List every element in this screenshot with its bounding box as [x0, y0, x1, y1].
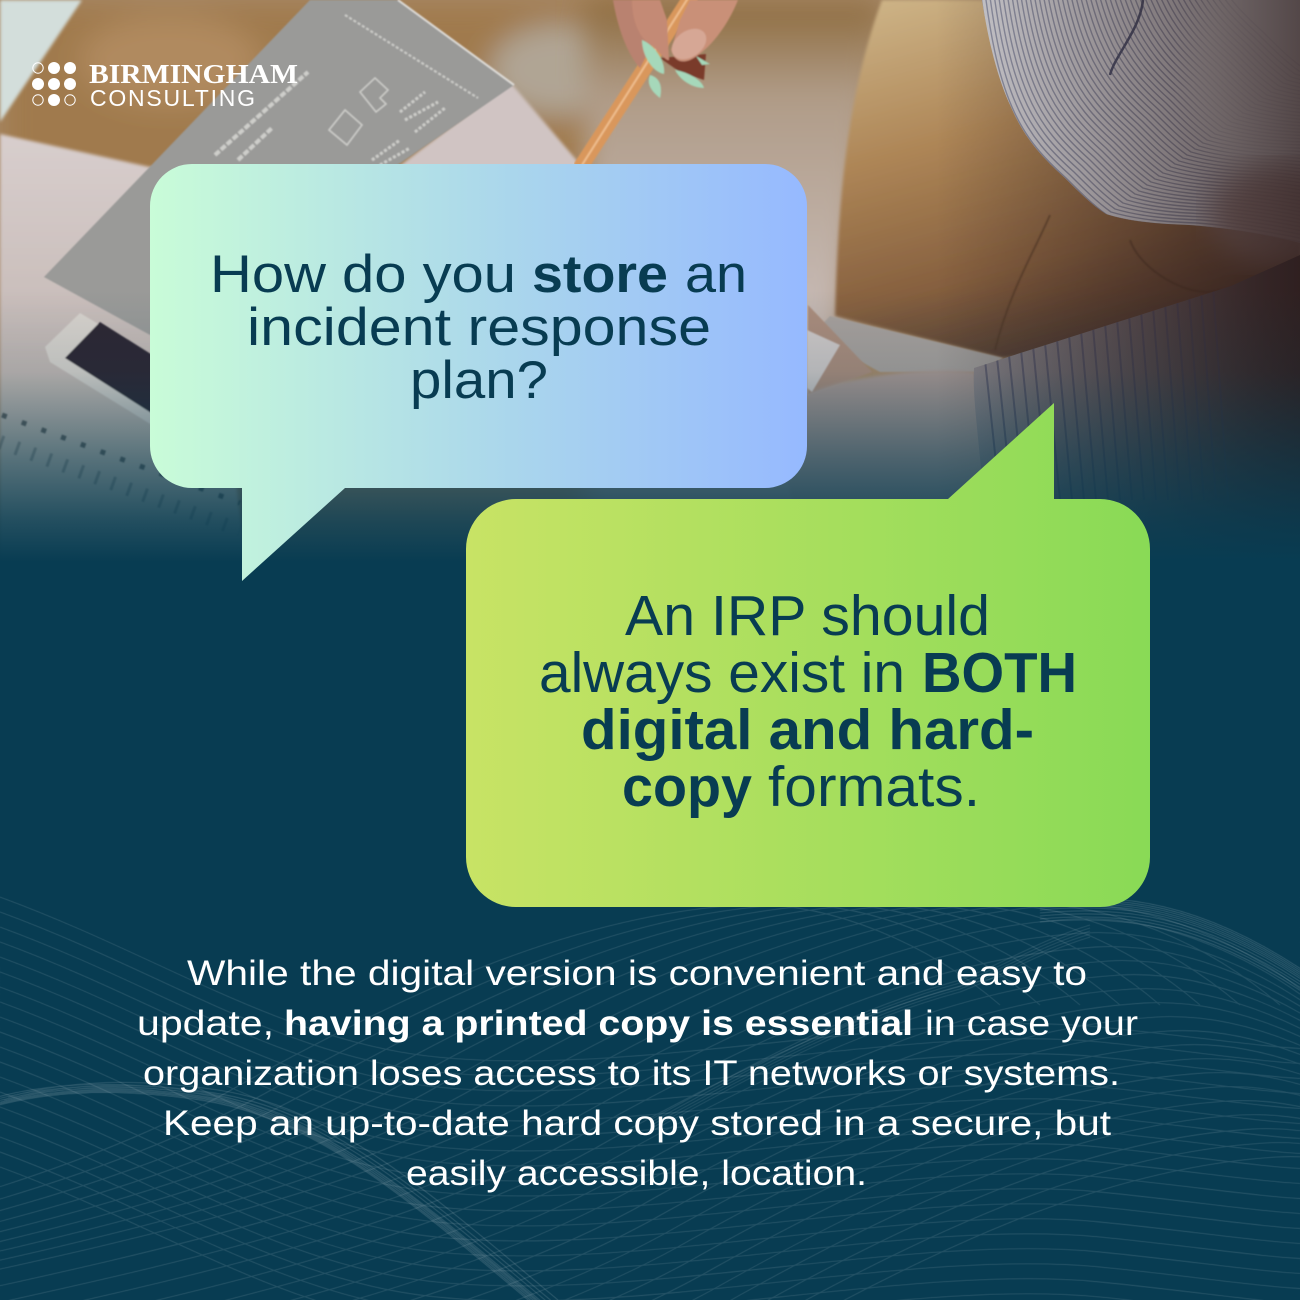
logo wordmark: CONSULTING [90, 85, 255, 111]
body paragraph [137, 953, 1138, 1193]
body paragraph: having a printed copy is essential [284, 1003, 913, 1043]
photo: phone on desk [45, 313, 200, 430]
photo: hand holding paper [785, 370, 990, 540]
body paragraph: While the digital version is convenient and easy to [187, 953, 1087, 993]
speech bubble: question [150, 164, 807, 581]
photo: pale paper sheet and notebook [0, 134, 250, 600]
answer text: copy [622, 755, 752, 819]
photo: fingers and green nails [613, 0, 738, 98]
gradient fade to navy [0, 290, 1300, 562]
photo: white sheet under trousers [812, 316, 1003, 372]
photo: wrist [808, 305, 872, 395]
photo: card icons and text [215, 15, 478, 165]
question text [210, 245, 747, 410]
photo: grey printed card [44, 0, 514, 335]
photo: striped shirt [977, 0, 1300, 265]
question text: How do you [210, 245, 516, 304]
photo background: desk scene [0, 0, 1300, 600]
logo wordmark [89, 59, 298, 111]
answer text: digital and hard- [581, 698, 1034, 762]
photo: wooden desk [0, 0, 640, 200]
logo mark: dot grid [32, 62, 76, 106]
logo: Birmingham Consulting [32, 59, 298, 111]
photo: trouser crease [995, 215, 1220, 350]
wave line pattern [0, 880, 1300, 1300]
body paragraph: update, [137, 1003, 274, 1043]
question text: store [532, 245, 668, 304]
photo: notebook spiral binding [0, 415, 240, 530]
photo: small card in hand [807, 330, 840, 392]
body paragraph: organization loses access to its IT networks or systems. [143, 1053, 1120, 1093]
speech bubble: answer [466, 403, 1150, 907]
answer text: always exist in [539, 641, 905, 705]
body paragraph: Keep an up-to-date hard copy stored in a secure, but [163, 1103, 1111, 1143]
photo: right side shading [0, 0, 1300, 600]
answer text: An IRP should [625, 584, 990, 648]
photo: white notebook corner [0, 0, 82, 122]
body paragraph: in case your [925, 1003, 1138, 1043]
photo: blurred cloth behind the hands [585, 0, 885, 600]
answer text [539, 584, 1077, 819]
question text: an [685, 245, 747, 304]
logo wordmark: BIRMINGHAM [89, 59, 298, 89]
photo: striped sleeve [974, 255, 1300, 502]
photo: pencil [580, 0, 692, 168]
body paragraph: easily accessible, location. [406, 1153, 867, 1193]
answer text: formats. [768, 755, 980, 819]
photo: pink sheet behind card [200, 82, 590, 320]
answer text: BOTH [922, 641, 1077, 705]
question text: plan? [410, 351, 548, 410]
question text: incident response [247, 298, 711, 357]
photo: khaki trousers [835, 0, 1300, 358]
